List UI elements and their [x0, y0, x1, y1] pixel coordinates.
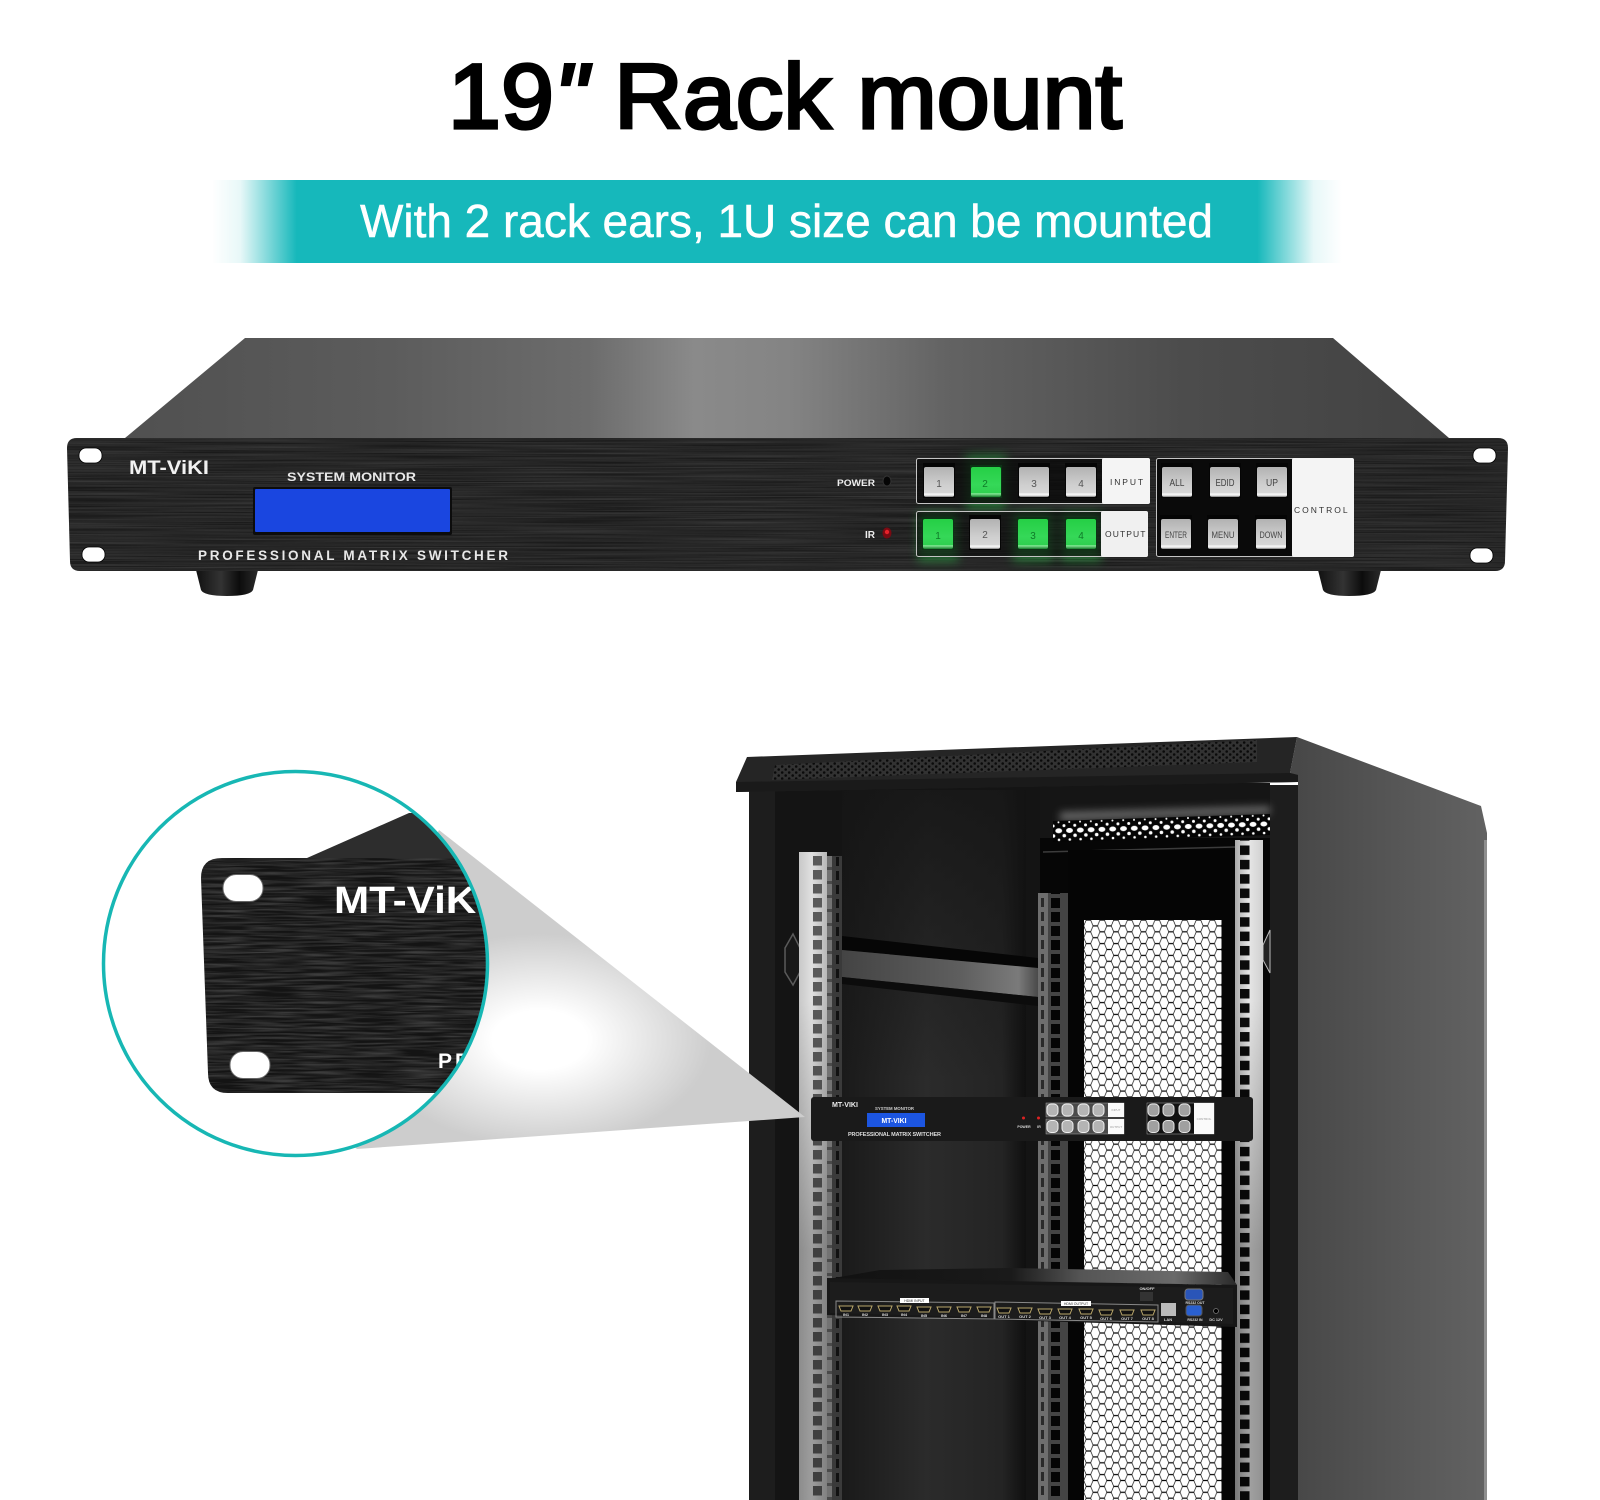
left hinge: [785, 934, 800, 985]
control button group: MENU: [1212, 530, 1234, 540]
magnified logo: MT-ViKI: [334, 880, 488, 922]
mounted unit LCD: [867, 1113, 925, 1127]
mounted unit LEDs: [1017, 1116, 1041, 1129]
HDMI input group: IN7: [961, 1313, 968, 1318]
RS232 in port: RS232 IN: [1187, 1318, 1203, 1322]
cabinet interior: [775, 783, 1270, 1500]
magnifier cone: [300, 830, 805, 1149]
mounted unit input buttons: [1046, 1103, 1124, 1117]
control button group: UP: [1266, 478, 1278, 489]
IR indicator: [865, 528, 892, 541]
HDMI input group: IN6: [941, 1313, 948, 1318]
shelf top: [828, 1268, 1237, 1285]
input button group: 4: [1078, 479, 1084, 490]
LAN port: LAN: [1164, 1317, 1172, 1322]
HDMI output group: OUT 8: [1142, 1316, 1155, 1321]
control label plate: [1292, 458, 1354, 557]
system monitor label: SYSTEM MONITOR: [287, 472, 417, 484]
rear middle rail: [1038, 893, 1068, 1500]
perforated back panel: [1068, 850, 1235, 1500]
right front rail: [1235, 840, 1263, 1500]
mounted unit LCD: MT-VIKI: [882, 1116, 906, 1125]
mounted unit product name: PROFESSIONAL MATRIX SWITCHER: [848, 1132, 941, 1138]
input button group: 2: [982, 479, 988, 490]
magnified rack ear: [201, 813, 486, 1093]
mounted unit LEDs: POWER: [1017, 1125, 1031, 1129]
input button group: INPUT: [1110, 477, 1145, 487]
product name: PROFESSIONAL MATRIX SWITCHER: [198, 548, 508, 563]
magnifier callout: [104, 772, 805, 1156]
HDMI input group: IN1: [843, 1312, 850, 1317]
rear panel: [827, 1278, 1237, 1327]
roof vent: [772, 740, 1257, 780]
RS232 out port: [1185, 1289, 1205, 1305]
control button group: DOWN: [1260, 530, 1282, 540]
power indicator: [837, 476, 891, 489]
output button group: [916, 511, 1148, 557]
mounted unit monitor label: SYSTEM MONITOR: [875, 1106, 915, 1111]
IR indicator: IR: [865, 530, 876, 541]
control button group: EDID: [1216, 478, 1234, 489]
HDMI input group: IN8: [981, 1313, 988, 1318]
DC power jack: DC 12V: [1209, 1318, 1223, 1322]
HDMI output group: OUT 4: [1059, 1315, 1072, 1320]
HDMI output group: OUT 1: [998, 1314, 1011, 1319]
side panel edge highlight: [1484, 840, 1487, 1500]
left foot: [196, 570, 258, 596]
mounted unit control buttons: CONTROL: [1197, 1117, 1212, 1121]
mounted unit output buttons: [1046, 1119, 1124, 1134]
left front rail: [799, 852, 842, 1500]
brand logo: MT-ViKI: [129, 457, 209, 479]
LCD display: [253, 487, 452, 535]
RS232 out port: RS232 OUT: [1185, 1301, 1205, 1305]
ceiling shade: [1040, 783, 1270, 838]
magnified product name: PROFESSIONAL: [438, 1050, 640, 1073]
mounted unit input buttons: INPUT: [1112, 1108, 1121, 1112]
input buttons: [923, 463, 955, 498]
HDMI input group: IN2: [862, 1312, 869, 1317]
output button group: 1: [935, 531, 941, 542]
HDMI input group: HDMI INPUT: [904, 1299, 926, 1303]
power switch: [1139, 1286, 1155, 1301]
magnified mounting holes: [223, 874, 270, 1078]
magnifier ring: [104, 772, 488, 1156]
magnifier circle: [104, 772, 488, 1156]
control button group: ENTER: [1165, 530, 1187, 540]
magnified top cover: [307, 813, 454, 858]
output label plate: [1101, 511, 1148, 557]
right hinge: [1263, 930, 1270, 973]
mounted unit logo: MT-VIKI: [832, 1100, 858, 1109]
HDMI output group: HDMI OUTPUT: [1064, 1302, 1089, 1306]
HDMI output group: [995, 1301, 1158, 1322]
subtitle band: [212, 180, 1342, 263]
HDMI output group: OUT 2: [1019, 1314, 1032, 1319]
control button group: [1156, 458, 1354, 557]
green button glow: [918, 455, 1101, 562]
HDMI input group: IN5: [921, 1313, 928, 1318]
output button group: 4: [1078, 531, 1084, 542]
mounted switcher front in cabinet: [811, 1097, 1253, 1141]
HDMI output group: OUT 6: [1100, 1316, 1113, 1321]
magnified ear plate: [201, 858, 486, 1093]
output button group: 2: [982, 530, 988, 541]
control button group: ALL: [1170, 478, 1185, 489]
input button group: 1: [936, 479, 942, 490]
mounted unit LEDs: IR: [1037, 1125, 1041, 1129]
rear-mounted switcher unit: [827, 1268, 1237, 1327]
matrix switcher front view: [60, 338, 1516, 596]
output buttons: [922, 517, 954, 550]
subtitle text: With 2 rack ears, 1U size can be mounted: [360, 195, 1213, 247]
LAN port: [1161, 1303, 1176, 1322]
mounted unit output buttons: OUTPUT: [1110, 1125, 1122, 1129]
device top cover: [125, 338, 1449, 438]
right foot: [1318, 570, 1381, 596]
output button group: 3: [1030, 531, 1036, 542]
rack ear holes: [79, 448, 1496, 563]
ceiling glow: [1060, 806, 1270, 821]
HDMI output group: OUT 5: [1080, 1315, 1093, 1320]
input box: [916, 458, 1150, 504]
HDMI input group: IN3: [882, 1312, 889, 1317]
cabinet roof: [736, 737, 1298, 792]
control box: [1156, 458, 1354, 556]
mounted unit control buttons: [1147, 1103, 1214, 1134]
control buttons: [1161, 463, 1193, 498]
ceiling perforated strip: [1053, 814, 1270, 842]
cabinet side panel: [1290, 737, 1487, 1500]
control button group: CONTROL: [1294, 505, 1350, 515]
server cabinet: [736, 737, 1487, 1500]
cabinet front frame: [749, 785, 1298, 1500]
HDMI output group: OUT 7: [1121, 1316, 1134, 1321]
input button group: [916, 458, 1150, 504]
HDMI input group: [836, 1298, 994, 1319]
input button group: 3: [1031, 479, 1037, 490]
HDMI output group: OUT 3: [1039, 1315, 1052, 1320]
mounted unit panel: [811, 1097, 1253, 1141]
output box: [916, 512, 1148, 556]
input label plate: [1102, 458, 1150, 504]
RS232 in port: [1186, 1305, 1203, 1322]
DC power jack: [1209, 1308, 1223, 1322]
cross brace: [842, 936, 1038, 1006]
power switch: ON/OFF: [1139, 1286, 1155, 1291]
front panel: [60, 436, 1516, 573]
HDMI input group: IN4: [901, 1312, 908, 1317]
power indicator: POWER: [837, 478, 875, 489]
output button group: OUTPUT: [1105, 529, 1147, 539]
title: 19" Rack mount: [448, 46, 1122, 148]
